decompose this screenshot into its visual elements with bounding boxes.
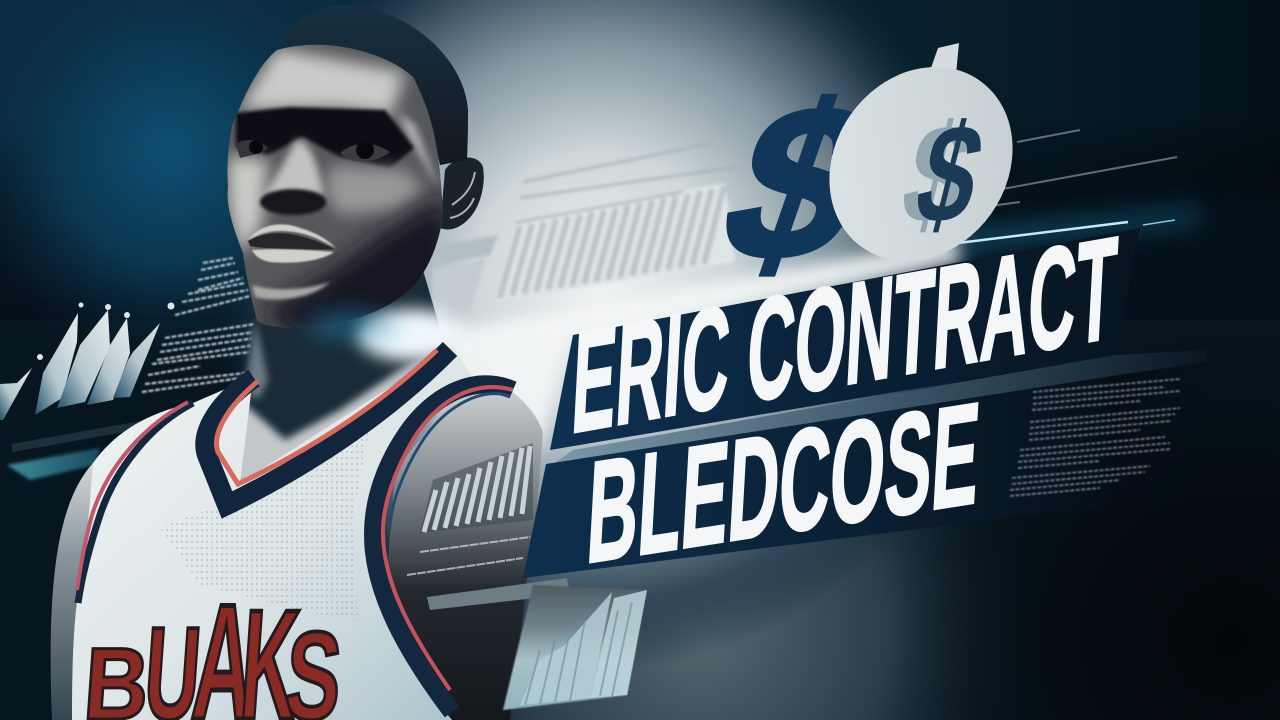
icon: dollar sign: $ (696, 61, 901, 305)
collar (205, 349, 450, 505)
hair (283, 5, 468, 165)
banner: ERIC CONTRACT (550, 207, 1140, 464)
chart spikes (0, 306, 171, 420)
left arm (51, 440, 135, 720)
panel (523, 360, 1216, 578)
ear (440, 158, 484, 229)
left eye (236, 140, 268, 158)
teal patch (7, 448, 100, 480)
left cheek (228, 155, 268, 255)
jersey lettering (80, 570, 346, 720)
chart tip dots (37, 302, 174, 360)
blue glow under chin (305, 311, 395, 339)
icon: money bag: $ (902, 96, 997, 253)
neck and chest (226, 260, 445, 488)
right arm (385, 378, 543, 720)
white glow above banner (440, 238, 960, 450)
left mini chart (0, 258, 255, 480)
lower lip (252, 249, 334, 263)
face (227, 44, 443, 328)
icon: money bag: $ (888, 96, 985, 253)
forehead highlight (232, 48, 405, 120)
gap strip (555, 350, 1207, 463)
armhole trim left (77, 402, 193, 603)
lower paper sheet (427, 578, 647, 710)
mouth (248, 233, 334, 250)
icon: money bag (792, 31, 1050, 297)
brow shadow (236, 107, 414, 168)
data table panel behind player (432, 143, 737, 318)
upper lip highlight (248, 224, 336, 248)
nose (262, 140, 325, 198)
small text block (142, 258, 255, 392)
right cheek (325, 165, 425, 215)
small text block (1010, 379, 1180, 496)
jersey mesh (160, 425, 370, 620)
banner streak glow (950, 208, 1200, 252)
chin highlight (252, 282, 330, 299)
speed lines right of money bag (983, 130, 1177, 207)
lower rule (12, 422, 158, 448)
right eye (340, 144, 390, 161)
nostrils (260, 189, 326, 215)
lower face shadow (262, 195, 455, 340)
banner: BLEDCOSE (523, 350, 1216, 594)
arm chart (407, 443, 533, 575)
money icons (696, 31, 1050, 305)
glow on neck (357, 309, 467, 361)
player (51, 5, 543, 720)
armhole trim right (373, 384, 513, 712)
jersey body (72, 347, 473, 720)
